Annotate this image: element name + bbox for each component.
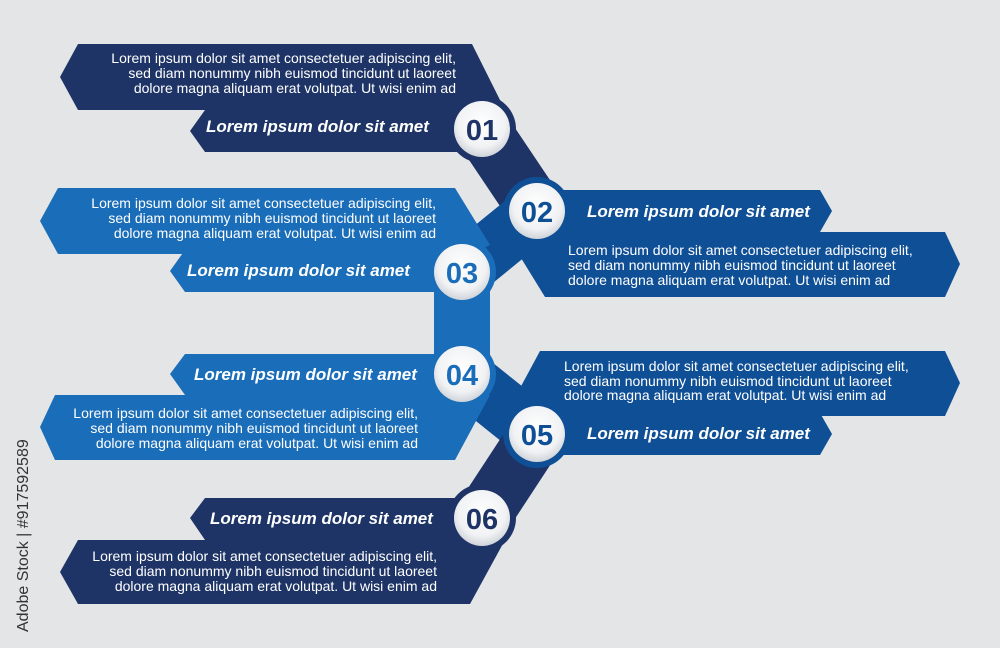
- step 03: Lorem ipsum dolor sit amet: [187, 261, 411, 280]
- step 02: 02: [521, 197, 553, 229]
- step 05: dolore magna aliquam erat volutpat. Ut wisi enim ad: [564, 387, 886, 403]
- step 03: Lorem ipsum dolor sit amet consectetuer adipiscing elit,: [91, 195, 436, 211]
- step 06: [60, 484, 516, 604]
- step 06: Lorem ipsum dolor sit amet consectetuer adipiscing elit,: [92, 548, 437, 564]
- step 01: [60, 44, 516, 163]
- step 05: sed diam nonummy nibh euismod tincidunt ut laoreet: [564, 373, 892, 389]
- step 01: sed diam nonummy nibh euismod tincidunt ut laoreet: [128, 65, 456, 81]
- step 02: dolore magna aliquam erat volutpat. Ut wisi enim ad: [568, 272, 890, 288]
- watermark id: Adobe Stock | #917592589: [15, 439, 32, 632]
- step 04: sed diam nonummy nibh euismod tincidunt ut laoreet: [90, 420, 418, 436]
- step 05: Lorem ipsum dolor sit amet: [587, 424, 811, 443]
- step 02: Lorem ipsum dolor sit amet consectetuer adipiscing elit,: [568, 242, 913, 258]
- step 04: 04: [446, 360, 478, 392]
- step 04: dolore magna aliquam erat volutpat. Ut wisi enim ad: [96, 435, 418, 451]
- step 05: [503, 351, 960, 468]
- step 01: dolore magna aliquam erat volutpat. Ut wisi enim ad: [134, 80, 456, 96]
- step 06: sed diam nonummy nibh euismod tincidunt ut laoreet: [109, 563, 437, 579]
- step 03: [40, 188, 496, 306]
- step 03: 03: [446, 258, 478, 290]
- step 04: Lorem ipsum dolor sit amet: [194, 365, 418, 384]
- step 02: [503, 177, 960, 297]
- step 05: 05: [521, 420, 553, 452]
- step 04: Lorem ipsum dolor sit amet consectetuer adipiscing elit,: [73, 405, 418, 421]
- step 04: [40, 340, 496, 460]
- step 02: sed diam nonummy nibh euismod tincidunt ut laoreet: [568, 257, 896, 273]
- step 01: Lorem ipsum dolor sit amet consectetuer adipiscing elit,: [111, 50, 456, 66]
- step 06: Lorem ipsum dolor sit amet: [210, 509, 434, 528]
- connectors: [462, 129, 537, 518]
- step 01: Lorem ipsum dolor sit amet: [206, 117, 430, 136]
- step 05: Lorem ipsum dolor sit amet consectetuer adipiscing elit,: [564, 358, 909, 374]
- step 02: Lorem ipsum dolor sit amet: [587, 202, 811, 221]
- step 03: dolore magna aliquam erat volutpat. Ut wisi enim ad: [114, 225, 436, 241]
- step 03: sed diam nonummy nibh euismod tincidunt ut laoreet: [108, 210, 436, 226]
- step 06: dolore magna aliquam erat volutpat. Ut wisi enim ad: [115, 578, 437, 594]
- step 06: 06: [466, 504, 498, 536]
- step 01: 01: [466, 115, 498, 147]
